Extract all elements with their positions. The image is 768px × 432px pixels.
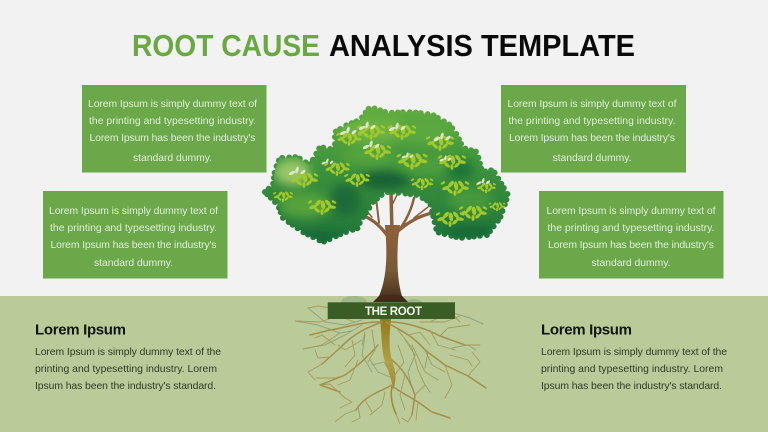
text box: upper left: the printing and typesetting industry. (89, 116, 256, 127)
text block: bottom left: Ipsum has been the industry's standard. (35, 381, 216, 392)
canopy shading (274, 116, 494, 244)
faint back roots (295, 308, 483, 388)
ground mounds (341, 296, 423, 310)
taproot (380, 319, 396, 390)
text box: lower left: standard dummy. (94, 258, 173, 269)
text box: lower right: the printing and typesetting industry. (548, 223, 714, 234)
text box: upper left: Lorem Ipsum is simply dummy text of (88, 99, 257, 110)
text block: bottom right: Ipsum has been the industry's standard. (541, 381, 722, 392)
text box: upper left: Lorem Ipsum has been the industry's (90, 133, 256, 144)
text box: lower left: Lorem Ipsum has been the industry's (50, 240, 216, 251)
text box: lower right: Lorem Ipsum is simply dummy text of (546, 206, 716, 217)
text box: lower left: Lorem Ipsum is simply dummy text of (49, 206, 218, 217)
text block: bottom left: Lorem Ipsum is simply dummy text of the (35, 347, 221, 358)
text box: lower left: the printing and typesetting industry. (50, 223, 217, 234)
pale leaves (288, 121, 491, 185)
text box: upper right: standard dummy. (552, 153, 632, 164)
text box: upper left: standard dummy. (133, 153, 212, 164)
text box: lower right: standard dummy. (592, 258, 670, 269)
leaf clusters (273, 124, 506, 227)
title: ROOT CAUSE (132, 28, 320, 63)
title: ANALYSIS TEMPLATE (329, 28, 635, 63)
text box: lower left (43, 191, 228, 278)
text block: bottom left: printing and typesetting industry. Lorem (35, 364, 217, 375)
text block: bottom right: Lorem Ipsum is simply dummy text of the (541, 347, 727, 358)
text block: bottom left: Lorem Ipsum (35, 322, 126, 338)
text box: upper left (82, 85, 266, 172)
text box: upper right: the printing and typesetting industry. (508, 116, 676, 127)
branches (354, 192, 438, 238)
tree (265, 107, 508, 310)
text block: bottom right: Lorem Ipsum (541, 322, 632, 338)
text block: bottom right: printing and typesetting industry. Lorem (541, 364, 723, 375)
ground panel (0, 296, 768, 432)
text block: bottom left (35, 322, 221, 392)
roots (295, 306, 486, 424)
text box: upper right (501, 85, 686, 172)
title (132, 28, 635, 63)
main branches (310, 322, 486, 418)
canopy silhouette (265, 107, 508, 242)
text block: bottom right (541, 322, 727, 392)
text box: upper right: Lorem Ipsum has been the industry's (509, 133, 675, 144)
text box: lower right: Lorem Ipsum has been the industry's (548, 240, 714, 251)
trunk (377, 225, 404, 300)
text box: lower right (539, 191, 724, 278)
root label (328, 302, 455, 319)
text box: upper right: Lorem Ipsum is simply dummy text of (508, 99, 677, 110)
root label: THE ROOT (365, 306, 422, 318)
